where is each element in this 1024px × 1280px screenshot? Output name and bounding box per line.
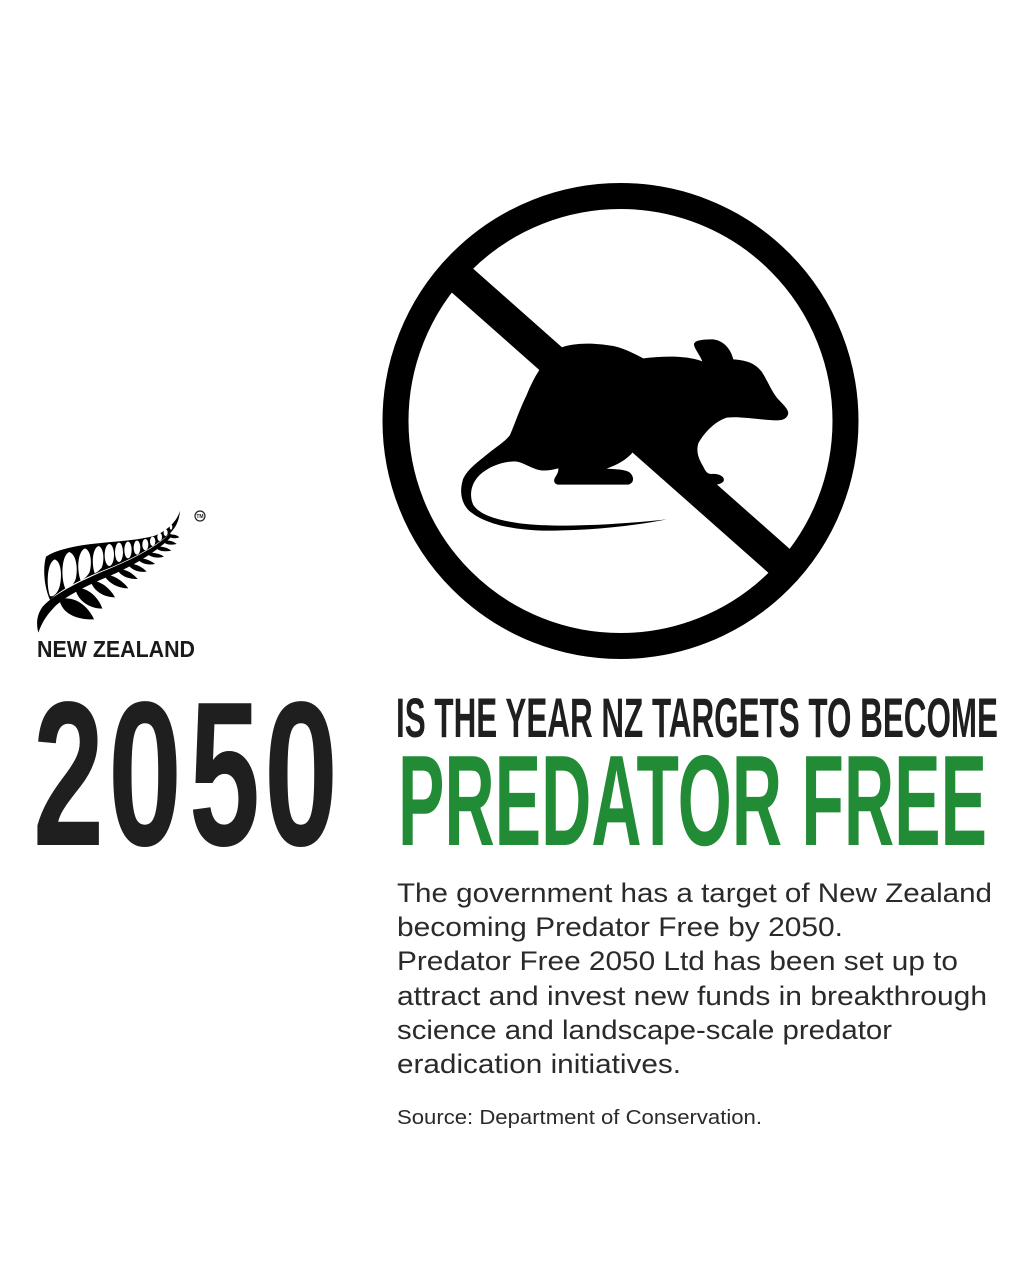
trademark mark: TM — [196, 514, 204, 520]
big year number: 5 — [189, 659, 260, 889]
white leaflet gaps — [48, 524, 172, 596]
body paragraph: The government has a target of New Zealand — [397, 878, 992, 908]
body paragraph: attract and invest new funds in breakthrough — [397, 981, 987, 1011]
icon: no-rat prohibition sign — [396, 196, 846, 646]
source note: Source: Department of Conservation. — [397, 1107, 762, 1129]
rat silhouette — [461, 339, 788, 531]
big year number — [33, 659, 338, 889]
body paragraph — [397, 878, 992, 1079]
body paragraph: Predator Free 2050 Ltd has been set up to — [397, 946, 958, 976]
big year number: 2 — [33, 659, 104, 889]
logo wordmark: NEW ZEALAND — [37, 636, 195, 662]
big year number: 0 — [264, 659, 338, 889]
logo: New Zealand silver fern — [37, 511, 205, 662]
lower leaflets — [59, 535, 179, 619]
frond stem — [37, 533, 173, 633]
icon: fern frond — [37, 511, 180, 633]
big year number: 0 — [108, 659, 182, 889]
body paragraph: eradication initiatives. — [397, 1049, 681, 1079]
trademark mark — [195, 511, 205, 521]
prohibition ring — [396, 196, 846, 646]
prohibition diagonal bar — [455, 274, 786, 567]
body paragraph: becoming Predator Free by 2050. — [397, 912, 843, 942]
body paragraph: science and landscape-scale predator — [397, 1015, 892, 1045]
upper frond with white leaflet gaps — [44, 511, 180, 600]
